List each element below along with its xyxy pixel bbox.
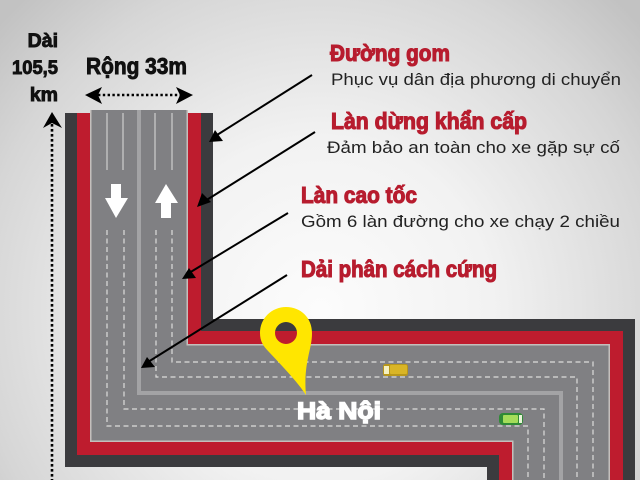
callout: Đường gom (330, 40, 621, 89)
dashed lane markings (107, 230, 593, 480)
callout: Làn cao tốc (301, 182, 620, 231)
callout: Làn cao tốc: Làn cao tốc (301, 182, 417, 208)
callout: Đường gom: Đường gom (330, 40, 450, 66)
emergency lane (red band) (139, 113, 561, 480)
length label: 105,5 (12, 57, 58, 79)
label: Hà Nội: Hà Nội (297, 398, 381, 425)
carriageway (139, 110, 561, 480)
callout: Làn dừng khẩn cấp: Làn dừng khẩn cấp (331, 108, 527, 134)
callout: Làn dừng khẩn cấp: Đảm bảo an toàn cho xe gặp sự cố (327, 138, 621, 157)
arrow: to emergency lane (197, 132, 315, 207)
width arrow (85, 87, 193, 104)
callout: Đường gom: Phục vụ dân địa phương di chuyển (331, 70, 621, 89)
icon: yellow car (383, 364, 408, 376)
length label (12, 30, 58, 106)
arrow: to expressway lane (182, 213, 288, 279)
icon: location pin (260, 307, 312, 395)
icon: down direction arrow (105, 184, 128, 218)
callout: Làn dừng khẩn cấp (327, 108, 621, 157)
length arrow (43, 112, 62, 480)
arrow: to service road (209, 75, 312, 142)
length label: Dài (28, 30, 58, 52)
icon: green car (499, 413, 523, 425)
width label: Rộng 33m (86, 53, 187, 79)
road edge (139, 110, 561, 480)
arrow: to hard median (141, 275, 287, 368)
icon: up direction arrow (155, 184, 178, 218)
length label: km (30, 84, 58, 106)
service road (dark band) (139, 113, 561, 480)
road diagram (105, 110, 593, 480)
solid lane markings (107, 113, 172, 170)
hard median (139, 110, 561, 480)
callout: Dải phân cách cứng: Dải phân cách cứng (301, 256, 497, 282)
callout: Làn cao tốc: Gồm 6 làn đường cho xe chạy 2 chiều (301, 212, 620, 231)
